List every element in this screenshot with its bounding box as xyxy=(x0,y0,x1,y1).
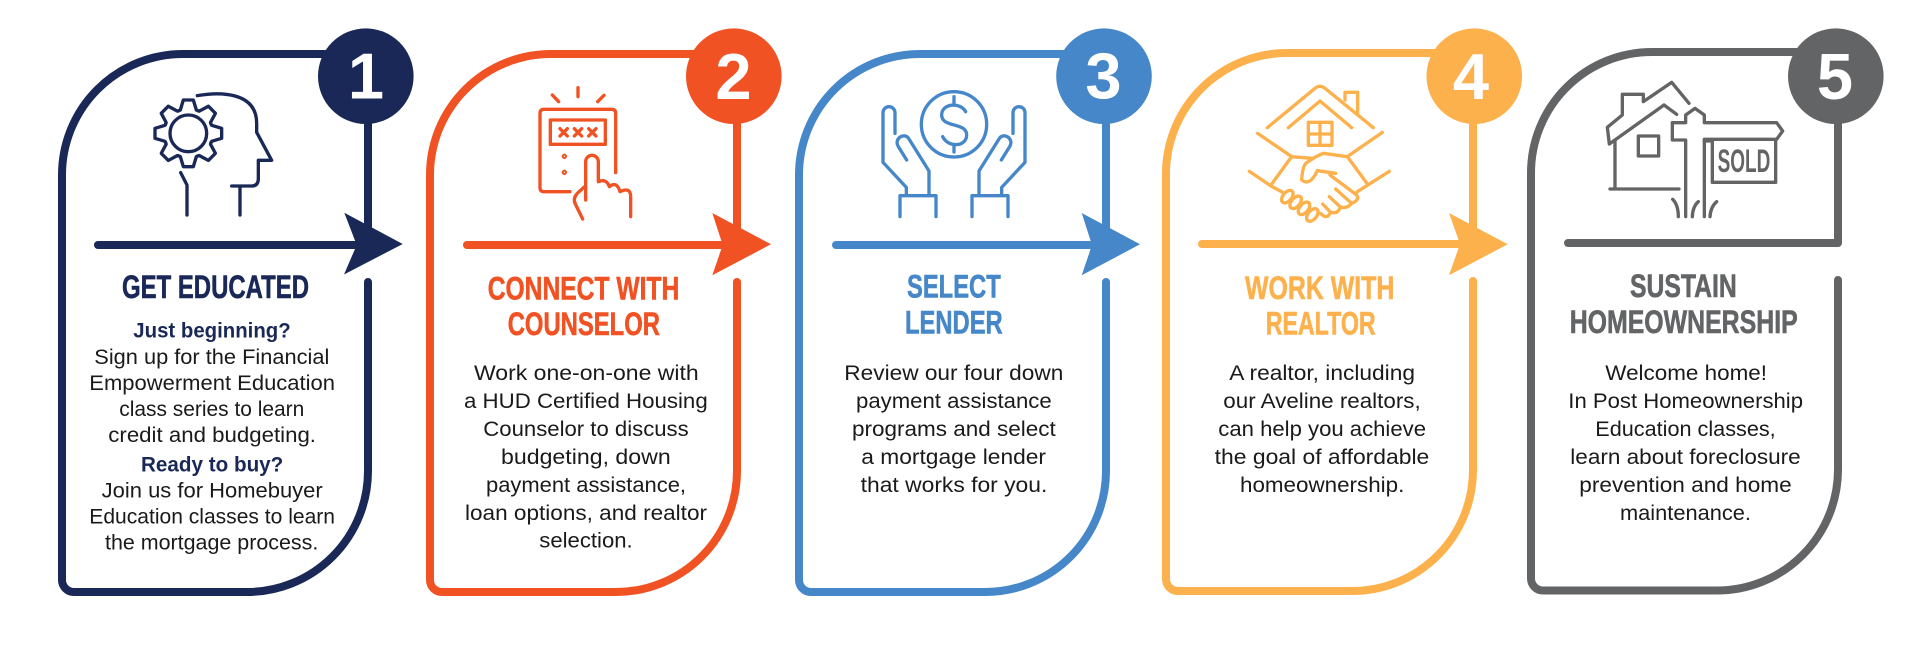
arrow xyxy=(1202,213,1508,275)
body text: Join us for Homebuyer xyxy=(102,478,323,502)
body text: Empowerment Education xyxy=(89,371,335,395)
heading: CONNECT WITH xyxy=(488,270,679,306)
heading: LENDER xyxy=(905,304,1003,340)
body text: a HUD Certified Housing xyxy=(464,389,708,413)
body text: homeownership. xyxy=(1240,473,1404,497)
body text: the goal of affordable xyxy=(1215,445,1429,469)
body text: budgeting, down xyxy=(501,445,671,469)
heading: GET EDUCATED xyxy=(122,269,309,305)
number badge 4 xyxy=(1426,28,1522,124)
icon: head with gear xyxy=(155,94,272,215)
body text xyxy=(1215,361,1429,497)
number badge 4: 4 xyxy=(1453,40,1489,113)
icon: house with sold sign: SOLD xyxy=(1718,143,1770,179)
body text: In Post Homeownership xyxy=(1568,389,1803,413)
panel: step 3 select lender xyxy=(799,28,1152,592)
number badge 2 xyxy=(686,28,782,124)
body text: Education classes, xyxy=(1595,417,1776,441)
panel: step 1 get educated xyxy=(62,28,414,592)
number badge 1: 1 xyxy=(348,40,384,112)
body text: Counselor to discuss xyxy=(483,417,689,441)
heading: WORK WITH xyxy=(1245,270,1394,306)
body text: payment assistance xyxy=(856,389,1052,413)
card outline xyxy=(430,54,737,592)
arrow xyxy=(467,213,771,275)
number badge 1 xyxy=(318,28,414,124)
number badge 5 xyxy=(1788,28,1884,124)
heading xyxy=(488,270,679,342)
body text xyxy=(1568,361,1803,525)
body text: credit and budgeting. xyxy=(108,423,316,447)
body text xyxy=(844,361,1063,497)
body text: Just beginning? xyxy=(133,319,291,343)
icon: house with sold sign xyxy=(1607,82,1783,217)
panel: step 5 sustain homeownership xyxy=(1531,28,1884,590)
body text: maintenance. xyxy=(1620,501,1751,525)
arrow xyxy=(836,213,1140,275)
heading: REALTOR xyxy=(1266,305,1376,341)
body text: a mortgage lender xyxy=(861,445,1046,469)
heading xyxy=(905,268,1003,340)
body text: loan options, and realtor xyxy=(465,501,707,525)
body text: programs and select xyxy=(852,417,1056,441)
body text xyxy=(89,319,335,554)
number badge 3: 3 xyxy=(1085,40,1122,112)
heading: SELECT xyxy=(907,268,1001,304)
heading: COUNSELOR xyxy=(508,306,660,342)
body text: Work one-on-one with xyxy=(474,361,699,385)
panel: step 2 connect with counselor xyxy=(430,28,782,592)
body text: that works for you. xyxy=(861,473,1047,497)
number badge 2: 2 xyxy=(715,40,752,113)
body text: Sign up for the Financial xyxy=(94,345,329,369)
body text: learn about foreclosure xyxy=(1570,445,1801,469)
body text: selection. xyxy=(539,528,633,552)
panel: step 4 work with realtor xyxy=(1166,28,1522,591)
body text: the mortgage process. xyxy=(105,530,318,554)
card outline xyxy=(62,54,368,592)
body text: A realtor, including xyxy=(1229,361,1415,385)
card outline xyxy=(1166,53,1473,591)
body text: Education classes to learn xyxy=(89,504,335,528)
body text: payment assistance, xyxy=(486,473,686,497)
body text: prevention and home xyxy=(1579,473,1792,497)
body text: Review our four down xyxy=(844,361,1063,385)
body text: can help you achieve xyxy=(1218,417,1426,441)
card outline xyxy=(799,54,1106,592)
heading xyxy=(1245,270,1394,341)
body text: our Aveline realtors, xyxy=(1223,389,1421,413)
arrow xyxy=(98,213,403,274)
body text xyxy=(464,361,708,552)
body text: Ready to buy? xyxy=(141,452,283,476)
icon: house and handshake xyxy=(1249,86,1389,223)
heading xyxy=(1570,268,1798,340)
number badge 5: 5 xyxy=(1817,40,1853,113)
heading: HOMEOWNERSHIP xyxy=(1570,304,1798,340)
card outline xyxy=(1531,52,1838,590)
number badge 3 xyxy=(1056,28,1152,124)
icon: keypad with finger xyxy=(540,88,631,219)
body text: Welcome home! xyxy=(1605,361,1767,385)
icon: hands holding dollar xyxy=(883,92,1025,217)
body text: class series to learn xyxy=(119,397,304,421)
heading: SUSTAIN xyxy=(1630,268,1737,304)
